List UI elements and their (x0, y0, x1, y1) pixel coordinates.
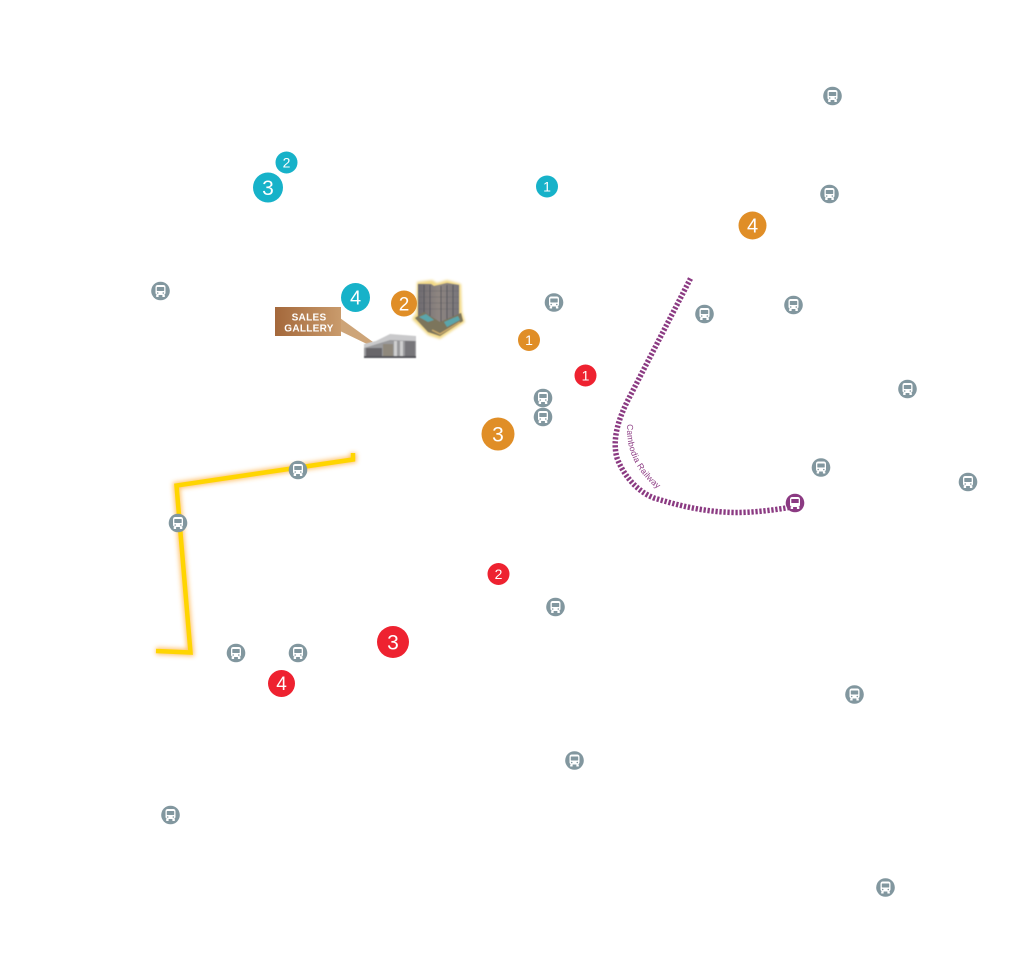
teal marker 2 (276, 152, 298, 174)
bus stop L (289, 461, 307, 479)
sales gallery callout pointer (340, 318, 373, 344)
orange marker 4: 4 (747, 216, 758, 238)
bus stop T (876, 878, 895, 897)
sales gallery label: GALLERY (284, 324, 334, 334)
teal markers (253, 152, 558, 312)
bus stop icons (151, 87, 977, 897)
orange marker 1 (518, 329, 540, 351)
red marker 3: 3 (387, 632, 399, 654)
red marker 4 (268, 670, 295, 697)
teal marker 3: 3 (262, 177, 274, 200)
bus stop M (169, 514, 187, 532)
red markers (268, 364, 596, 697)
bus stop S (161, 806, 180, 824)
orange marker 2: 2 (399, 294, 409, 316)
bus stop J (812, 458, 830, 477)
bus stop P (289, 644, 307, 662)
bus stop Q (845, 685, 864, 704)
orange marker 2 (391, 290, 417, 316)
orange marker 3: 3 (492, 424, 504, 446)
teal marker 1 (536, 176, 558, 198)
railway line (615, 278, 795, 512)
teal marker 4: 4 (350, 288, 361, 310)
yellow road line (156, 453, 353, 652)
orange markers (391, 212, 766, 450)
red marker 2: 2 (495, 566, 503, 582)
orange marker 4 (738, 212, 766, 240)
sales gallery label: SALES (292, 312, 326, 324)
bus stop R (565, 751, 584, 770)
orange marker 1: 1 (525, 332, 533, 348)
bus stop D (545, 293, 563, 312)
teal marker 4 (341, 283, 370, 312)
bus stop F (784, 296, 803, 314)
bus stop H (534, 389, 552, 407)
orange marker 3 (482, 418, 514, 450)
red marker 3 (377, 626, 409, 658)
railway label: Cambodia Railway (627, 424, 660, 488)
teal marker 3 (253, 172, 283, 202)
bus stop K (959, 473, 977, 491)
red marker 4: 4 (276, 674, 287, 695)
red marker 1: 1 (582, 368, 590, 384)
bus stop N (546, 598, 565, 616)
bus stop C (151, 282, 170, 300)
red marker 1 (574, 364, 596, 386)
bus stop A (823, 87, 842, 105)
bus stop E (695, 305, 714, 323)
teal marker 2: 2 (283, 154, 291, 170)
residential tower image (412, 280, 465, 339)
bus stop B (820, 185, 839, 203)
sales gallery label (275, 307, 341, 336)
bus stop O (227, 644, 245, 662)
rail station icon (786, 494, 804, 512)
bus stop G (898, 380, 917, 398)
teal marker 1: 1 (543, 178, 551, 194)
red marker 2 (488, 563, 510, 585)
sales gallery building (364, 334, 416, 358)
bus stop I (534, 408, 552, 426)
